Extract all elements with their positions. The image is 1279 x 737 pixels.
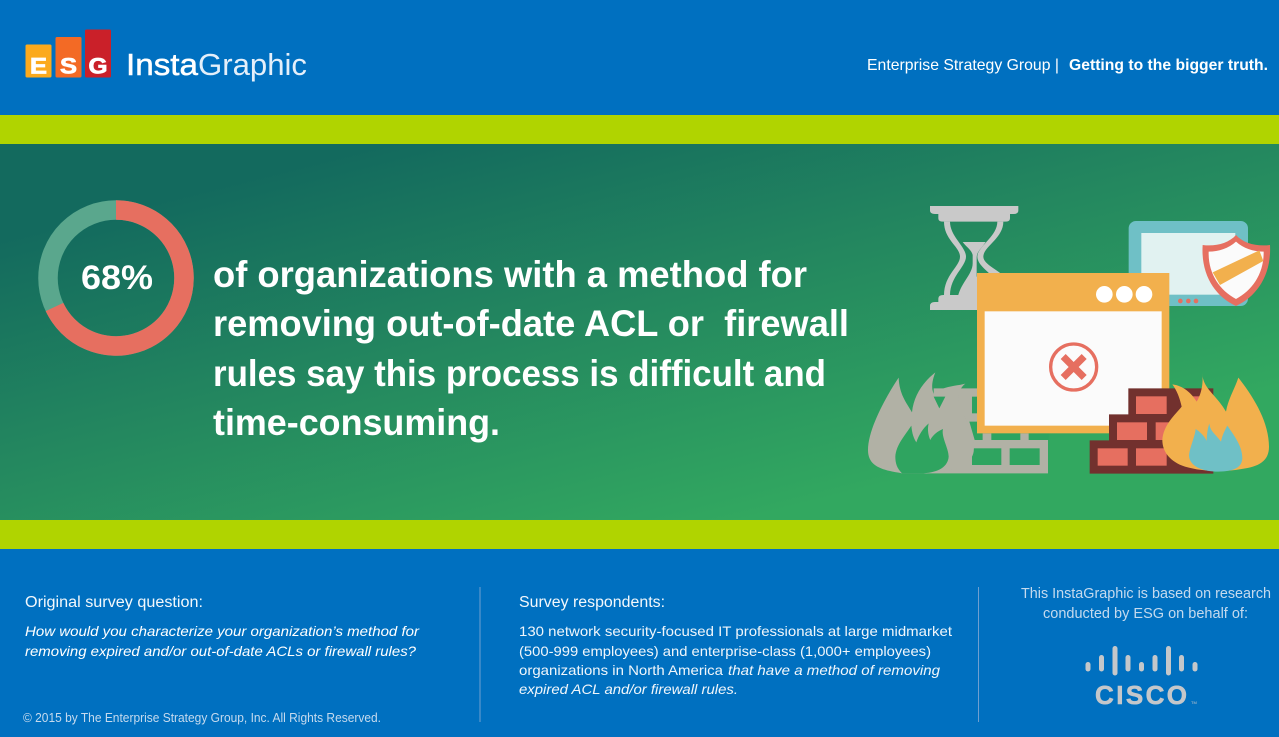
donut chart: 68%: 68% <box>81 259 153 297</box>
survey respondents: 130 network security-focused IT professionals at large midmarket <box>519 623 952 639</box>
survey question: Original survey question: <box>25 594 203 611</box>
logo wordmark: Graphic <box>198 47 307 82</box>
logo: Cisco: CISCO <box>1095 680 1187 710</box>
icon: browser window with error mark <box>977 273 1169 433</box>
survey question: How would you characterize your organization’s method for <box>25 623 420 639</box>
survey respondents: expired ACL and/or firewall rules. <box>519 681 738 697</box>
tagline: Enterprise Strategy Group | <box>867 57 1059 74</box>
survey respondents <box>519 594 952 697</box>
logo: Cisco <box>1088 648 1197 710</box>
donut chart: 68% <box>48 210 184 346</box>
logo: ESG bars: S <box>60 54 77 78</box>
headline statement <box>213 254 849 443</box>
icon: grey brick wall <box>924 388 1049 473</box>
survey respondents: Survey respondents: <box>519 594 665 611</box>
sponsor note: conducted by ESG on behalf of: <box>1043 605 1248 622</box>
logo: ESG bars <box>26 30 111 78</box>
headline statement: removing out-of-date ACL or firewall <box>213 303 849 344</box>
main green panel <box>0 144 1279 520</box>
bottom lime band <box>0 520 1279 549</box>
sponsor note: This InstaGraphic is based on research <box>1021 585 1271 602</box>
survey question: removing expired and/or out-of-date ACLs or firewall rules? <box>25 643 416 659</box>
survey respondents: organizations in North America <box>519 662 723 678</box>
header band <box>0 0 1279 115</box>
logo wordmark: Insta <box>126 47 199 82</box>
headline statement: time-consuming. <box>213 402 500 443</box>
sponsor note <box>1021 585 1271 622</box>
logo: Cisco: TM <box>1191 700 1197 705</box>
headline statement: rules say this process is difficult and <box>213 353 826 394</box>
logo: ESG bars: E <box>30 54 47 78</box>
logo: ESG bars: G <box>88 54 108 78</box>
tagline: Getting to the bigger truth. <box>1069 57 1268 74</box>
survey respondents: (500-999 employees) and enterprise-class (1,000+ employees) <box>519 643 931 659</box>
icon: red brick wall <box>1090 388 1213 474</box>
footer panel <box>0 549 1279 737</box>
illustration: firewall and security scene <box>868 206 1270 474</box>
icon: hourglass <box>930 206 1018 310</box>
headline statement: of organizations with a method for <box>213 254 807 295</box>
copyright: © 2015 by The Enterprise Strategy Group, Inc. All Rights Reserved. <box>23 711 381 725</box>
icon: tablet <box>1129 221 1248 306</box>
survey question <box>25 594 420 659</box>
icon: shield <box>1202 235 1270 306</box>
icon: orange flame <box>1162 373 1269 472</box>
top lime band <box>0 115 1279 144</box>
survey respondents: that have a method of removing <box>728 662 940 678</box>
icon: grey flame <box>868 372 974 473</box>
